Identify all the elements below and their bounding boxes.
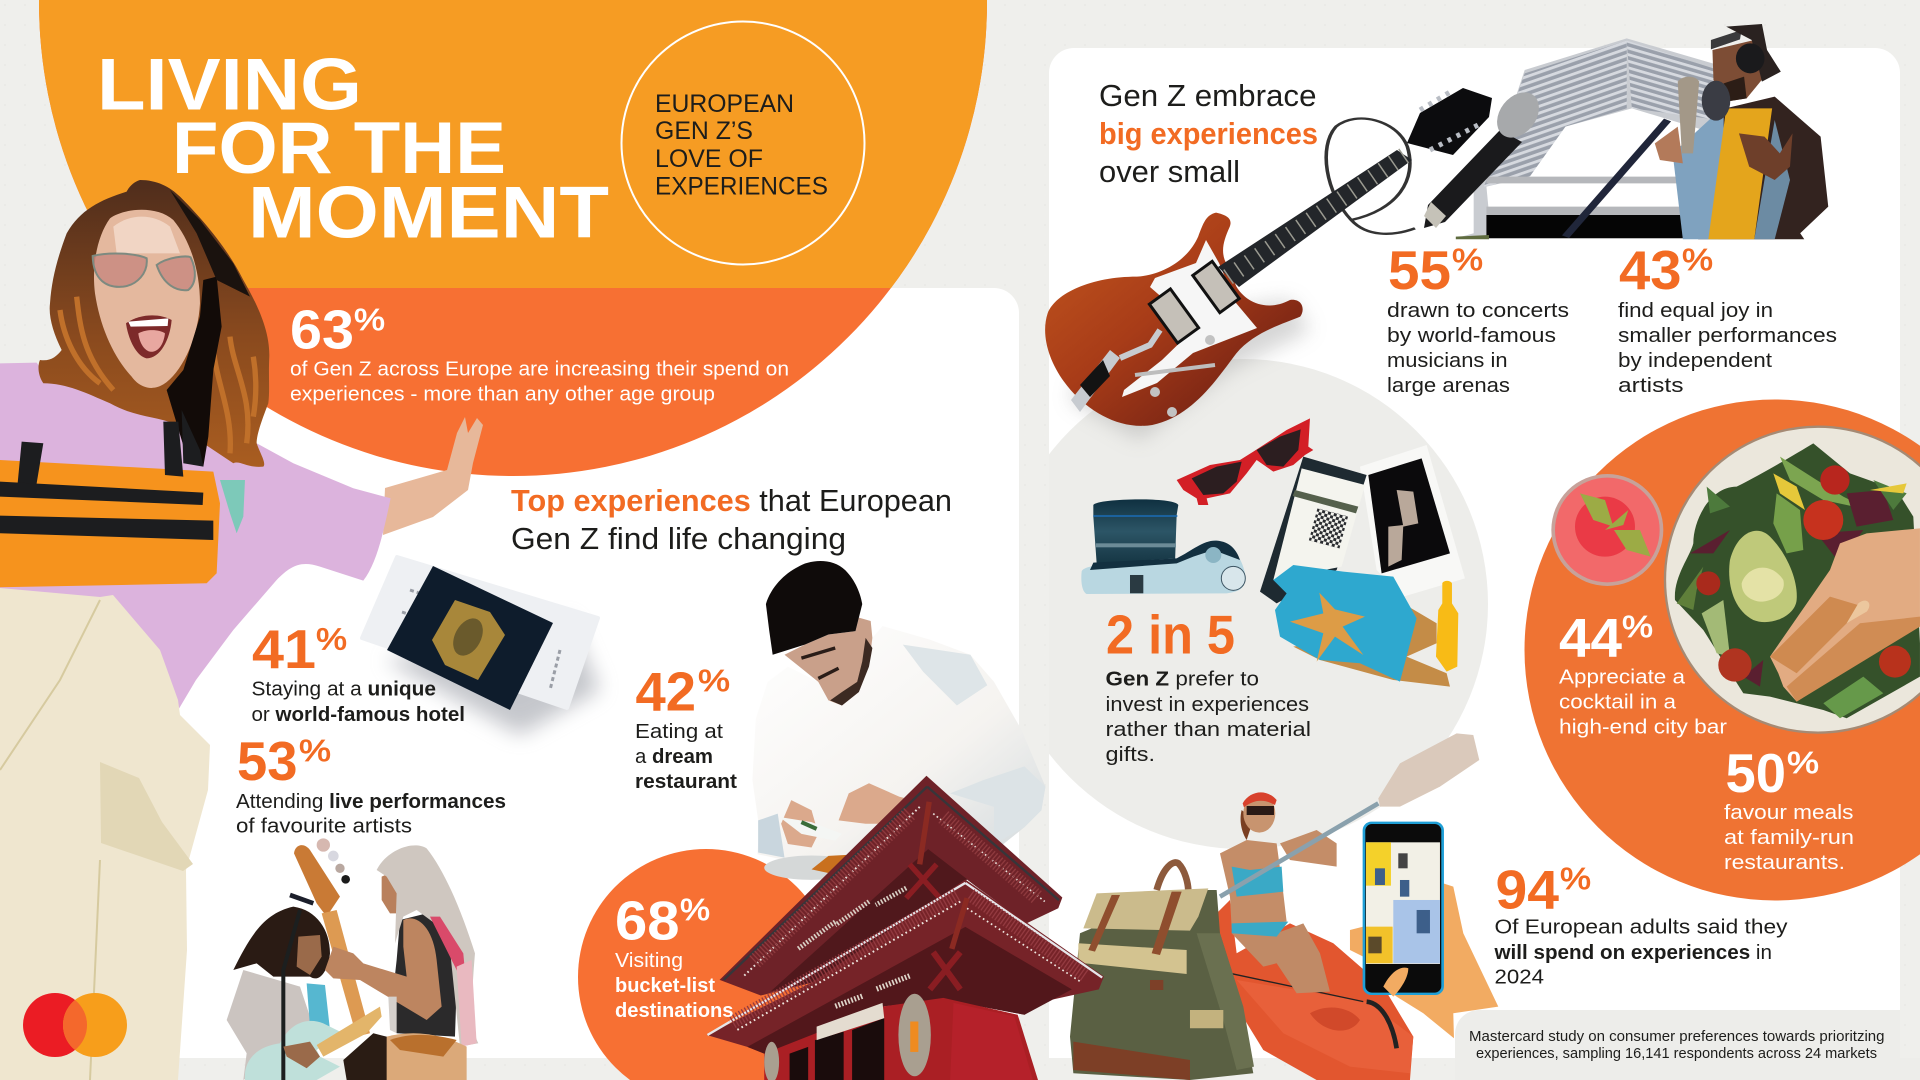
pickguard bbox=[1122, 240, 1257, 397]
panel: right white panel bbox=[1049, 48, 1900, 1058]
stat: 55%: drawn to concerts bbox=[1387, 299, 1569, 322]
stat: 50%: favour meals bbox=[1724, 801, 1854, 824]
heading: Gen Z embrace big experiences: Gen Z embrace bbox=[1099, 79, 1316, 113]
photo: band musicians bbox=[227, 838, 478, 1080]
yellow shirt bbox=[1708, 108, 1772, 239]
stat: 55%: large arenas bbox=[1387, 374, 1510, 397]
coat bbox=[752, 626, 1045, 859]
shirt print bbox=[220, 480, 245, 533]
mic stand bbox=[283, 910, 300, 1080]
headphones bbox=[1736, 43, 1764, 73]
woman bag bbox=[387, 1033, 467, 1080]
stat: 2 in 5 bbox=[1106, 604, 1311, 766]
heading: Gen Z embrace big experiences: big experiences bbox=[1099, 117, 1318, 151]
stat: 50%: restaurants. bbox=[1724, 851, 1845, 874]
guitar cable bbox=[1326, 119, 1415, 234]
woman arm bbox=[325, 918, 442, 1020]
photo: passport and boarding pass bbox=[362, 557, 600, 735]
stat: 50%: % bbox=[1787, 745, 1819, 780]
mic stand bbox=[1566, 120, 1668, 237]
subtitle circle: EUROPEAN bbox=[655, 90, 794, 118]
stat: 44%: high-end city bar bbox=[1559, 716, 1727, 738]
stat: 41% bbox=[252, 618, 465, 726]
stat: 53% bbox=[236, 730, 506, 838]
hair strands bbox=[60, 297, 256, 453]
hand bbox=[283, 1042, 320, 1068]
photo: cocktail glass bbox=[1551, 474, 1663, 586]
stat: 63% bbox=[290, 298, 789, 406]
stat: 44%: 44 bbox=[1559, 606, 1622, 668]
circle: grey 2 in 5 background bbox=[1049, 359, 1488, 848]
photo: temple bbox=[707, 776, 1104, 1080]
stat: 53%: % bbox=[299, 733, 331, 768]
heading: top experiences: Gen Z find life changing bbox=[511, 522, 846, 556]
stat: 42%: a dream bbox=[635, 745, 713, 768]
headstock bbox=[1407, 88, 1492, 155]
stat: 2 in 5: Gen Z prefer to bbox=[1106, 668, 1259, 690]
face bbox=[94, 210, 200, 388]
photo: kayak with paddler bbox=[1213, 733, 1479, 1080]
trousers bbox=[0, 588, 210, 1080]
red sunglasses bbox=[1177, 418, 1313, 505]
photo: woman with orange bag bbox=[0, 180, 483, 1080]
hair bbox=[766, 561, 862, 655]
stat: 63%: 63 bbox=[290, 298, 354, 360]
source note: Mastercard study on consumer preferences towards prioritzing bbox=[1469, 1028, 1884, 1045]
condenser mic bbox=[1678, 77, 1699, 153]
stat: 44%: Appreciate a bbox=[1559, 666, 1686, 688]
stat: 43% bbox=[1618, 239, 1837, 397]
stat: 43%: % bbox=[1682, 242, 1713, 277]
title: LIVING bbox=[97, 44, 362, 126]
stat: 55%: % bbox=[1452, 242, 1483, 277]
stat: 53%: Attending live performances bbox=[236, 790, 506, 813]
photo: singer bbox=[1566, 24, 1828, 239]
stat: 68%: 68 bbox=[615, 890, 680, 952]
hair bbox=[39, 180, 269, 467]
stat: 42% bbox=[635, 660, 737, 793]
salmon bbox=[1770, 528, 1920, 702]
shirt bbox=[0, 363, 391, 737]
stat: 50% bbox=[1724, 742, 1854, 874]
tremolo bbox=[1071, 350, 1120, 412]
phone bbox=[1260, 457, 1367, 603]
towel bbox=[1273, 565, 1417, 682]
stat: 68% bbox=[615, 890, 734, 1022]
heading: top experiences: Top experiences that European bbox=[511, 484, 952, 518]
swimwear bbox=[1232, 867, 1283, 897]
paddler torso bbox=[1220, 840, 1287, 928]
stat: 94%: will spend on experiences in bbox=[1493, 941, 1772, 964]
stat: 55% bbox=[1387, 239, 1569, 397]
stat: 44%: cocktail in a bbox=[1559, 690, 1677, 714]
source note box bbox=[1455, 1010, 1920, 1080]
paddle bbox=[1378, 733, 1479, 807]
subtitle circle: GEN Z’S bbox=[655, 117, 753, 145]
head bbox=[1712, 40, 1764, 102]
stat: 2 in 5: gifts. bbox=[1106, 743, 1155, 766]
heading: top experiences bbox=[511, 484, 952, 556]
stat: 94%: Of European adults said they bbox=[1494, 916, 1788, 938]
photo: travel flat lay bbox=[1081, 418, 1465, 687]
hands bbox=[1739, 133, 1793, 180]
bass headstock and neck bbox=[294, 845, 340, 917]
temple lantern bbox=[898, 994, 931, 1076]
temple upper roof bbox=[720, 776, 1062, 995]
pickups bbox=[1193, 261, 1239, 313]
curly hair bbox=[233, 907, 330, 978]
dark hair side bbox=[167, 277, 222, 467]
guitarist jacket bbox=[227, 970, 313, 1080]
stat: 63%: of Gen Z across Europe are increasing their spend on bbox=[290, 358, 789, 380]
photo: phone held in hand bbox=[1350, 822, 1498, 1038]
stat: 55%: by world-famous bbox=[1387, 324, 1556, 347]
circle: 68% bucket-list background bbox=[578, 849, 834, 1080]
stat: 43%: smaller performances bbox=[1618, 324, 1837, 347]
stat: 41%: or world-famous hotel bbox=[252, 703, 465, 726]
photo: electric guitar with cable bbox=[1045, 88, 1492, 440]
woman body bbox=[390, 913, 457, 1037]
starfish bbox=[1290, 593, 1365, 662]
stat: 41%: Staying at a unique bbox=[252, 678, 436, 700]
arm bbox=[383, 417, 483, 535]
stat: 43%: find equal joy in bbox=[1618, 299, 1773, 322]
denim bbox=[1673, 107, 1724, 239]
stat: 53%: of favourite artists bbox=[236, 814, 412, 838]
woman hair bbox=[377, 845, 478, 1047]
kayak bbox=[1213, 900, 1413, 1080]
stat: 42%: % bbox=[698, 663, 730, 698]
bag straps bbox=[0, 410, 213, 540]
stat: 94%: 94 bbox=[1496, 858, 1559, 920]
mouth bbox=[126, 315, 172, 358]
photo: backpack bbox=[1070, 863, 1254, 1080]
logo: Mastercard bbox=[23, 993, 127, 1057]
guitarist blue top bbox=[307, 983, 330, 1030]
bag bbox=[0, 460, 220, 587]
stat: 2 in 5: invest in experiences bbox=[1106, 693, 1309, 716]
panel: left white panel bbox=[100, 288, 1019, 1058]
paddler head bbox=[1241, 810, 1253, 840]
paddler arm bbox=[1280, 830, 1337, 867]
heading: Gen Z embrace big experiences: over small bbox=[1099, 155, 1240, 189]
camera bbox=[1081, 499, 1245, 594]
beard bbox=[1724, 77, 1747, 102]
dark guitar body bbox=[343, 1033, 400, 1080]
trouser pocket bbox=[100, 762, 193, 871]
guitarist face bbox=[297, 935, 322, 975]
paddler legs bbox=[1232, 923, 1330, 993]
temple body bbox=[764, 998, 1038, 1080]
panel: header circle with orange lower band bbox=[39, 0, 987, 476]
leafy salad bbox=[1675, 443, 1920, 718]
stat: 50%: at family-run bbox=[1724, 826, 1854, 849]
stat: 68%: % bbox=[680, 892, 710, 927]
hands bbox=[839, 783, 913, 824]
small plate bbox=[779, 817, 842, 841]
pop filter bbox=[1702, 81, 1730, 121]
heading: Gen Z embrace big experiences bbox=[1099, 79, 1318, 189]
stat: 55%: 55 bbox=[1388, 239, 1451, 301]
woman face bbox=[382, 870, 400, 913]
subtitle circle: EXPERIENCES bbox=[655, 172, 828, 200]
beach basket bbox=[1293, 602, 1450, 687]
stat: 63%: experiences - more than any other age group bbox=[290, 382, 715, 406]
temple lower roof bbox=[707, 880, 1104, 1054]
stat: 94%: % bbox=[1560, 861, 1591, 896]
jacket bbox=[1698, 97, 1828, 239]
face bbox=[784, 618, 872, 705]
stat: 43%: 43 bbox=[1619, 239, 1682, 301]
guitar neck bbox=[1218, 150, 1412, 287]
stat: 44% bbox=[1559, 606, 1727, 738]
stat: 42%: Eating at bbox=[635, 720, 723, 743]
avocado bbox=[1729, 531, 1797, 622]
large plate bbox=[764, 856, 859, 880]
stat: 41%: % bbox=[316, 622, 347, 656]
photo: stage structure bbox=[1456, 38, 1724, 239]
photo: salad and salmon plate bbox=[1665, 427, 1920, 733]
photo: chef bbox=[752, 561, 1045, 880]
sunscreen bottle bbox=[1436, 581, 1458, 672]
stat: 68%: destinations bbox=[615, 999, 734, 1022]
stat: 44%: % bbox=[1622, 609, 1653, 644]
stat: 68%: Visiting bbox=[615, 949, 683, 972]
stat: 94% bbox=[1493, 858, 1788, 988]
stat: 42%: restaurant bbox=[635, 770, 737, 793]
stat: 53%: 53 bbox=[237, 730, 298, 792]
stat: 50%: 50 bbox=[1726, 742, 1786, 804]
title bbox=[97, 44, 609, 254]
stat: 63%: % bbox=[354, 302, 385, 337]
stat: 2 in 5: rather than material bbox=[1106, 718, 1311, 741]
photo: handheld microphone bbox=[1424, 84, 1548, 228]
stat: 42%: 42 bbox=[636, 660, 696, 722]
stat: 43%: by independent bbox=[1618, 349, 1772, 372]
title: MOMENT bbox=[248, 172, 609, 254]
bass fretboard lower bbox=[317, 1007, 382, 1057]
stat: 55%: musicians in bbox=[1387, 349, 1508, 372]
title: FOR THE bbox=[172, 108, 506, 189]
subtitle circle bbox=[622, 22, 864, 264]
circle: orange food background bbox=[1524, 400, 1920, 900]
subtitle circle: LOVE OF bbox=[655, 145, 763, 173]
stat: 94%: 2024 bbox=[1494, 966, 1544, 988]
mint guitar body bbox=[245, 1021, 340, 1080]
stat: 68%: bucket-list bbox=[615, 974, 715, 997]
source note bbox=[1469, 1028, 1884, 1062]
glasses bbox=[93, 254, 195, 290]
stat: 43%: artists bbox=[1618, 374, 1684, 397]
source note: experiences, sampling 16,141 respondents across 24 markets bbox=[1476, 1045, 1877, 1062]
guitar body bbox=[1045, 213, 1303, 426]
polaroid bbox=[1360, 445, 1465, 597]
stat: 41%: 41 bbox=[252, 618, 316, 680]
stat: 2 in 5: 2 in 5 bbox=[1106, 604, 1235, 666]
